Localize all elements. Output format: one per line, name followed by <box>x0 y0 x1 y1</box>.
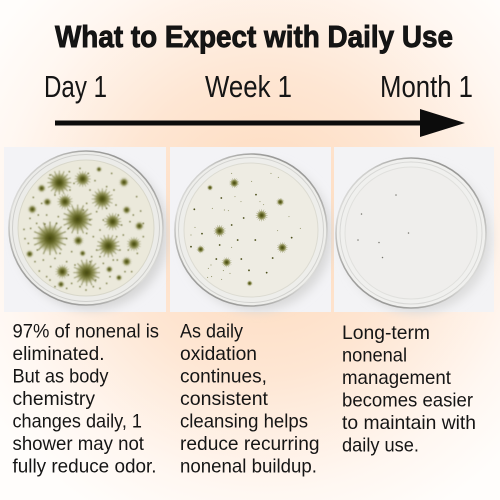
text block: day 1: fully reduce odor. <box>12 456 156 478</box>
text block: day 1: eliminated. <box>12 343 104 365</box>
timeline labels: Month 1 <box>380 69 473 104</box>
text block: month 1: management <box>342 367 452 389</box>
text block: month 1: Long-term <box>342 322 430 344</box>
timeline arrow <box>55 109 465 137</box>
text block: week 1: oxidation <box>180 343 257 365</box>
panel: week 1 petri dish <box>170 147 332 312</box>
text block: week 1: consistent <box>180 388 269 410</box>
text block: month 1: daily use. <box>342 434 419 456</box>
timeline labels: Week 1 <box>205 69 292 104</box>
text block: day 1: But as body <box>12 366 109 388</box>
title: What to Expect with Daily Use <box>55 19 453 54</box>
text block: week 1: cleansing helps <box>180 410 308 432</box>
text block: day 1: 97% of nonenal is <box>12 320 159 342</box>
text block: month 1: nonenal <box>342 344 407 366</box>
text block: month 1: becomes easier <box>342 390 473 412</box>
text block: week 1: nonenal buildup. <box>180 456 317 478</box>
text block: week 1: reduce recurring <box>180 433 320 455</box>
colonies <box>191 173 300 286</box>
text block: day 1 <box>12 320 159 478</box>
panel: month 1 petri dish <box>334 147 494 313</box>
text block: day 1: changes daily, 1 <box>12 410 142 432</box>
text block: week 1: continues, <box>180 366 267 388</box>
text block: day 1: chemistry <box>12 388 95 410</box>
timeline labels <box>44 69 473 104</box>
text block: month 1 <box>342 322 476 456</box>
specks <box>358 195 408 258</box>
timeline labels: Day 1 <box>44 69 107 104</box>
text block: week 1 <box>180 320 320 478</box>
text block: day 1: shower may not <box>12 433 145 455</box>
panel: day 1 petri dish <box>4 147 168 312</box>
text block: month 1: to maintain with <box>342 412 476 434</box>
text block: week 1: As daily <box>180 320 243 342</box>
colonies <box>24 166 144 290</box>
